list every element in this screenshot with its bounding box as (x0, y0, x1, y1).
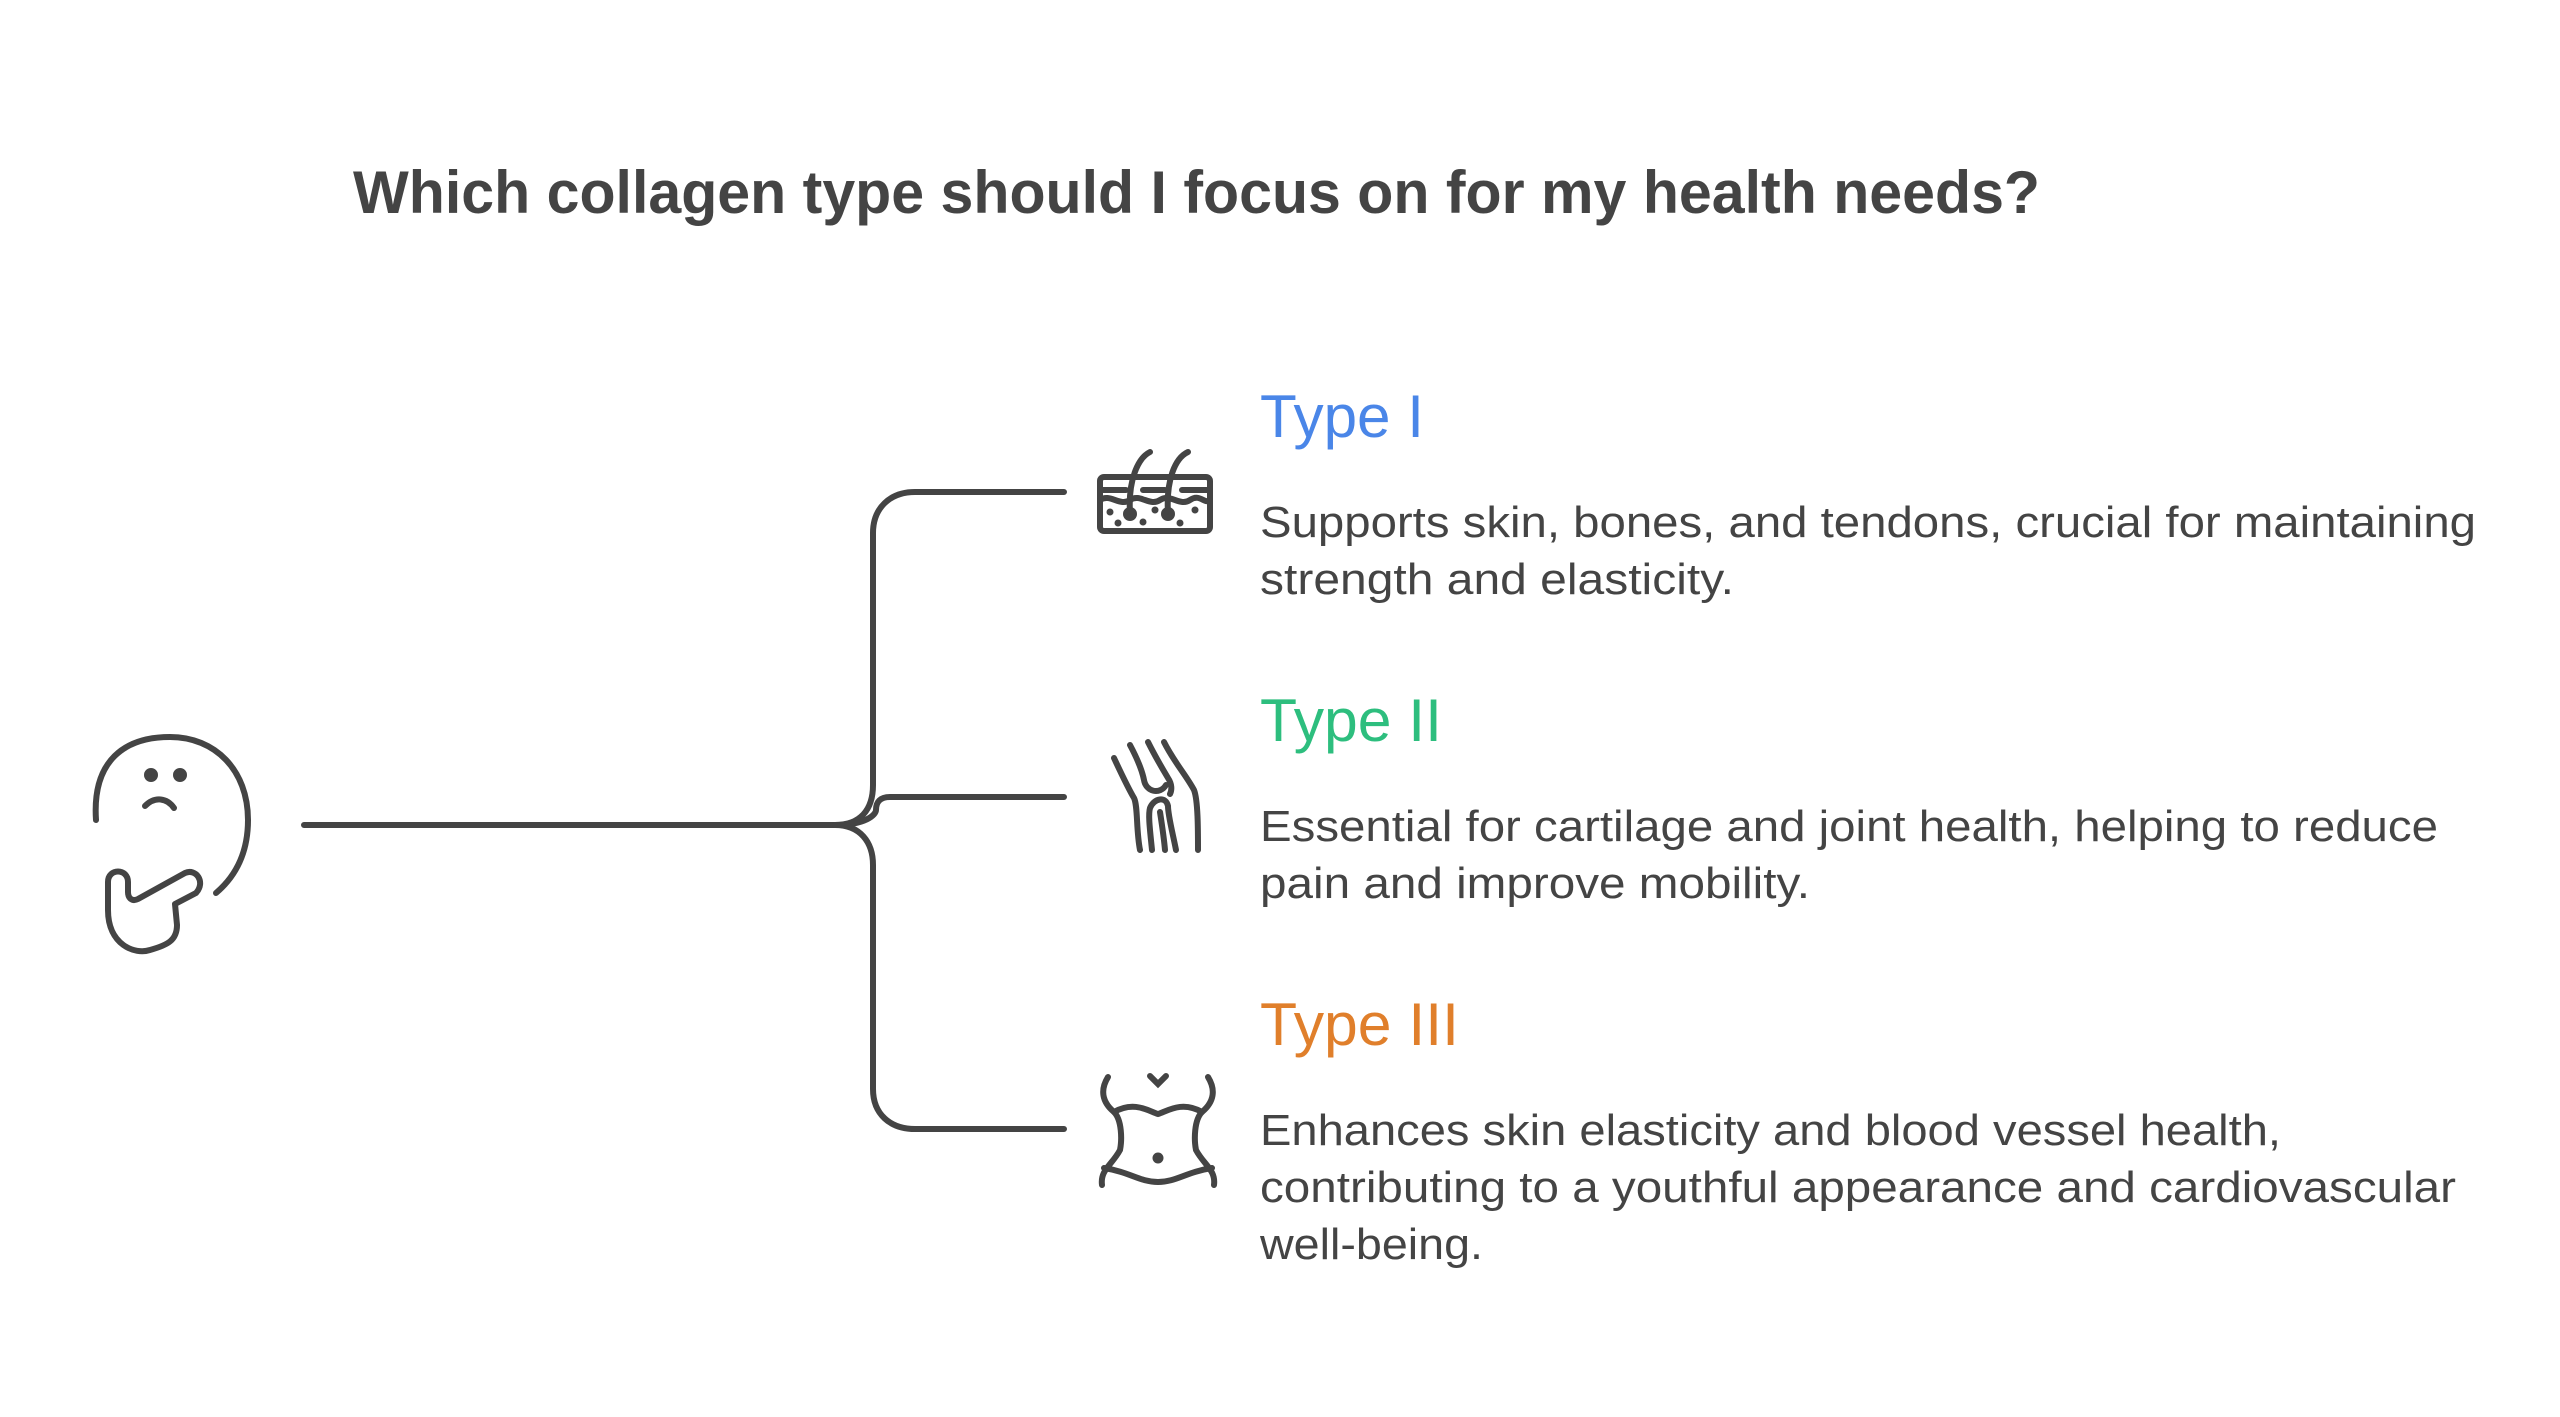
heading: Type I: Type I (1260, 383, 1424, 450)
heading: Type II: Type II (1260, 687, 1442, 754)
heading: Type III: Type III (1260, 991, 1459, 1058)
text: Type III description (1259, 1106, 2456, 1269)
icon: knee joint (1114, 742, 1198, 850)
icon: thinking face (96, 737, 248, 951)
text: Type I description (1260, 498, 2476, 604)
text: Type III description: well-being. (1259, 1220, 1483, 1269)
text: Type I description: strength and elasticity. (1260, 555, 1734, 604)
text: Type I description: Supports skin, bones, and tendons, crucial for maintaining (1260, 498, 2476, 547)
icon: skin layers (1100, 452, 1210, 531)
text: Type II description: pain and improve mobility. (1260, 859, 1810, 908)
connector lines (304, 492, 1064, 1129)
text: Type II description (1260, 802, 2438, 908)
text: Type III description: contributing to a youthful appearance and cardiovascular (1260, 1163, 2456, 1212)
icon: waist (1102, 1076, 1214, 1185)
text: Type II description: Essential for cartilage and joint health, helping to reduce (1260, 802, 2438, 851)
title: Which collagen type should I focus on for my health needs? (353, 159, 2040, 226)
text: Type III description: Enhances skin elasticity and blood vessel health, (1260, 1106, 2281, 1155)
